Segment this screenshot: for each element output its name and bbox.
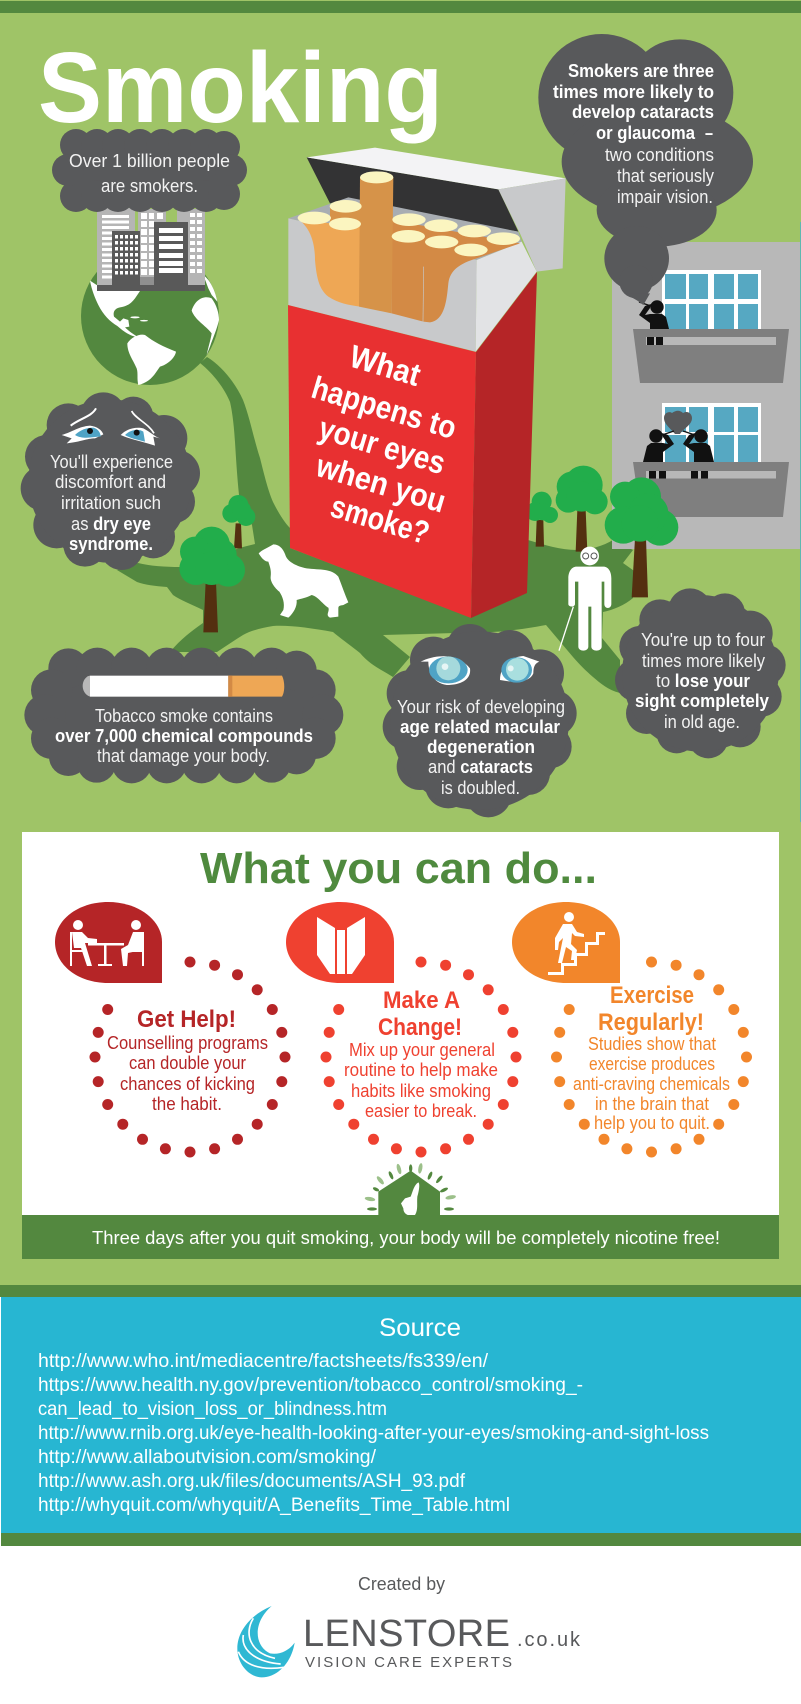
text block: exercise: Regularly! [598, 1009, 704, 1036]
source list [38, 1351, 709, 1516]
callout: lose sight: to lose your [656, 671, 750, 691]
text block: get help: Get Help! [137, 1006, 236, 1033]
text block: make a change: Change! [378, 1014, 462, 1041]
source list: http://www.allaboutvision.com/smoking/ [38, 1447, 377, 1468]
badge: table meeting [55, 902, 162, 983]
callout: smoke cloud about cataracts: develop cataracts [572, 102, 714, 122]
callout: lose sight: times more likely [642, 651, 765, 671]
text block: exercise: Exercise [610, 982, 694, 1009]
callout: smoke cloud about cataracts: impair vision. [617, 187, 713, 207]
badge: book [286, 902, 394, 983]
wide eyes icon [421, 656, 539, 685]
pack question text: smoke? [327, 488, 434, 551]
text block: exercise: exercise produces [589, 1054, 715, 1074]
text block: get help: chances of kicking [120, 1074, 255, 1094]
right edge teal sliver [800, 222, 801, 822]
pack red front [288, 305, 476, 618]
text block: exercise [573, 982, 730, 1133]
dotted ring [320, 956, 522, 1158]
callout: macular degeneration: and cataracts [428, 757, 533, 777]
upper smoker [639, 300, 670, 333]
text block: get help [107, 1006, 268, 1114]
callout: smoke cloud about cataracts: Smokers are three [568, 61, 714, 81]
callout: discomfort and irritation: irritation such [61, 493, 161, 513]
ground paths connecting the facts [117, 357, 637, 693]
text block: make a change: Mix up your general [349, 1040, 495, 1060]
dotted ring [90, 956, 290, 1158]
callout: lose sight [615, 588, 786, 758]
text block: make a change: easier to break. [365, 1101, 477, 1121]
icon: globe with city [81, 208, 219, 385]
text block: get help: can double your [129, 1053, 246, 1073]
callout: discomfort and irritation: as dry eye [71, 514, 151, 534]
pack inner ledge [288, 197, 522, 260]
pack gray front collar [288, 218, 477, 352]
lid side [498, 178, 566, 272]
tree medium right [556, 466, 608, 552]
pack question text [308, 338, 461, 551]
callout: tobacco chemicals: that damage your body. [97, 746, 270, 766]
callout: tobacco chemicals: Tobacco smoke contains [95, 706, 273, 726]
pack question text: when you [311, 447, 450, 520]
callout: smoke cloud about cataracts: that seriously [617, 166, 714, 186]
callout: lose sight: You're up to four [641, 630, 765, 650]
text block: exercise: Studies show that [588, 1034, 716, 1054]
callout: smoke cloud about cataracts: times more likely to [553, 82, 714, 102]
source list: https://www.health.ny.gov/prevention/tobacco_control/smoking_- [38, 1375, 583, 1396]
icon: dog [259, 544, 348, 618]
upper window [662, 270, 761, 330]
logo: Lenstore [237, 1606, 581, 1677]
source list: http://www.ash.org.uk/files/documents/ASH_93.pdf [38, 1471, 466, 1492]
text block: get help: the habit. [152, 1094, 222, 1114]
icon: house with thumbs up [364, 1163, 456, 1216]
tree small left [222, 495, 255, 548]
logo: Lenstore: .co.uk [517, 1629, 581, 1651]
upper balcony [633, 329, 789, 383]
text block: make a change [344, 987, 498, 1121]
cigarettes [297, 171, 520, 322]
dotted ring [551, 956, 752, 1158]
logo swirl [237, 1606, 295, 1677]
callout: macular degeneration: Your risk of developing [397, 697, 565, 717]
text block: exercise: anti-craving chemicals [573, 1074, 730, 1094]
lower window [662, 403, 761, 462]
continents [90, 275, 219, 385]
heading: What you can do... [200, 844, 597, 893]
callout: over 1 billion: Over 1 billion people [69, 151, 230, 171]
panel: apartment building [612, 242, 801, 549]
callout band: nicotine free [22, 1215, 779, 1259]
callout: lose sight: sight completely [635, 691, 769, 711]
text block: make a change: habits like smoking [351, 1081, 491, 1101]
title: Smoking [38, 32, 443, 144]
pack question text: What [345, 338, 425, 393]
lower balcony [633, 462, 789, 517]
icon: cigarette pack [288, 148, 566, 618]
column: make a change [286, 902, 522, 1158]
small smoke cloud [664, 411, 692, 434]
sore eyes icon [62, 408, 160, 446]
pack question text: your eyes [315, 410, 450, 481]
pack dark red side [471, 272, 537, 618]
logo: Lenstore: VISION CARE EXPERTS [305, 1654, 512, 1671]
tree small right behind pack [526, 492, 558, 547]
source list: http://whyquit.com/whyquit/A_Benefits_Time_Table.html [38, 1495, 510, 1516]
trees [179, 466, 678, 632]
column: get help [55, 902, 290, 1158]
text block: exercise: in the brain that [595, 1094, 709, 1114]
callout: lose sight: in old age. [664, 712, 740, 732]
pack question text: happens to [308, 369, 461, 446]
panel: what you can do [22, 832, 779, 1216]
callout: smoke cloud about cataracts: or glaucoma [596, 123, 696, 143]
text block: exercise: help you to quit. [594, 1113, 710, 1133]
text block: make a change: routine to help make [344, 1060, 498, 1080]
text block: get help: Counselling programs [107, 1033, 268, 1053]
callout: discomfort and irritation: discomfort and [55, 472, 166, 492]
city buildings [97, 208, 205, 291]
callout: discomfort and irritation [21, 392, 200, 570]
callout: tobacco chemicals: over 7,000 chemical compounds [55, 726, 313, 746]
callout: macular degeneration [383, 624, 577, 817]
source list: http://www.who.int/mediacentre/factsheets/fs339/en/ [38, 1351, 489, 1372]
source list: can_lead_to_vision_loss_or_blindness.htm [38, 1399, 387, 1420]
source list: http://www.rnib.org.uk/eye-health-looking-after-your-eyes/smoking-and-sight-loss [38, 1423, 709, 1444]
text block: make a change: Make A [383, 987, 460, 1014]
callout: smoke cloud about cataracts [538, 34, 753, 305]
created by label: Created by [358, 1574, 445, 1594]
column: exercise regularly [512, 902, 752, 1158]
pack light side collar [476, 242, 537, 352]
tree big right [605, 477, 678, 597]
source heading: Source [379, 1314, 461, 1342]
lid top [307, 148, 566, 189]
tree big left [179, 527, 245, 632]
callout: over 1 billion [52, 129, 247, 212]
callout band: nicotine free: Three days after you quit smoking, your body will be completely nicotine free! [92, 1228, 720, 1248]
callout: macular degeneration: is doubled. [441, 778, 520, 798]
logo: Lenstore: LENSTORE [303, 1613, 510, 1655]
callout: macular degeneration: age related macular [400, 717, 560, 737]
callout: discomfort and irritation: syndrome. [69, 534, 153, 554]
callout: smoke cloud about cataracts: – [705, 123, 713, 143]
callout: smoke cloud about cataracts: two conditions [605, 145, 714, 165]
callout: discomfort and irritation: You'll experience [50, 452, 173, 472]
badge: stairs [512, 902, 620, 983]
callout: tobacco chemicals [24, 648, 343, 783]
lid dark inner [307, 157, 518, 232]
callout: over 1 billion: are smokers. [101, 176, 198, 196]
two smokers [643, 429, 714, 462]
icon: blind man with cane [559, 547, 611, 651]
top dark green bar [0, 1, 801, 13]
panel: green top background [0, 0, 801, 1285]
callout: macular degeneration: degeneration [427, 737, 535, 757]
panel: sources [0, 1285, 801, 1546]
cigarette icon [83, 676, 284, 697]
